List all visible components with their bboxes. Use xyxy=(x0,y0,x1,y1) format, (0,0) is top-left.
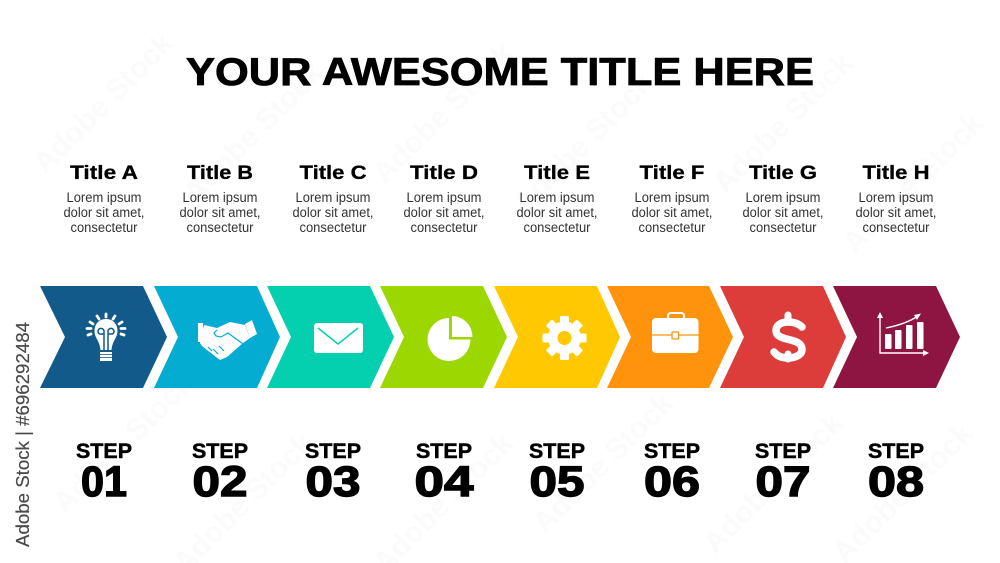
step label 05 xyxy=(529,440,585,506)
text block: Title D: Lorem ipsum xyxy=(406,190,482,205)
watermark pattern: Adobe Stock xyxy=(507,67,660,220)
text block: Title A: dolor sit amet, xyxy=(64,205,144,220)
text block: Title H: consectetur xyxy=(862,220,930,235)
text block: Title B xyxy=(180,162,260,235)
step label 02: 02 xyxy=(192,458,248,506)
text block: Title D: dolor sit amet, xyxy=(404,205,484,220)
step label 01: STEP xyxy=(76,440,132,463)
text block: Title G: Title G xyxy=(749,162,817,184)
text block: Title C: consectetur xyxy=(300,220,367,235)
text block: Title A: Title A xyxy=(70,162,138,184)
chevron 5: yellow xyxy=(494,286,620,388)
watermark pattern: Adobe Stock xyxy=(27,27,180,180)
step label 08: STEP xyxy=(868,440,924,463)
text block: Title H: Lorem ipsum xyxy=(858,190,934,205)
step label 05: STEP xyxy=(529,440,585,463)
step label 06: 06 xyxy=(644,458,700,506)
watermark pattern: Adobe Stock xyxy=(47,367,200,520)
icon: bar chart with arrows xyxy=(877,312,929,356)
step label 03 xyxy=(305,440,361,506)
chevron 2: light blue xyxy=(154,286,280,388)
step label 03: 03 xyxy=(306,458,360,506)
text block: Title A xyxy=(64,162,144,235)
icon: pie chart xyxy=(428,316,472,361)
step label 02 xyxy=(192,440,248,506)
text block: Title F: consectetur xyxy=(638,220,706,235)
icon: gear xyxy=(542,316,586,360)
icon: dollar sign xyxy=(774,315,802,359)
text block: Title H: dolor sit amet, xyxy=(856,205,936,220)
text block: Title H: Title H xyxy=(862,162,930,184)
icon: handshake xyxy=(198,320,257,360)
step label 08 xyxy=(868,440,924,506)
text block: Title C: dolor sit amet, xyxy=(292,205,374,220)
step label 06: STEP xyxy=(644,440,700,463)
step label 04 xyxy=(414,440,474,506)
text block: Title B: Lorem ipsum xyxy=(182,190,258,205)
text block: Title F: Lorem ipsum xyxy=(634,190,710,205)
step label 02: STEP xyxy=(192,440,248,463)
chevron 4: green xyxy=(380,286,507,388)
watermark pattern: Adobe Stock xyxy=(707,47,860,200)
step label 06 xyxy=(644,440,700,506)
text block: Title G: consectetur xyxy=(750,220,817,235)
chevron 7: red xyxy=(720,286,846,388)
watermark pattern: Adobe Stock xyxy=(697,407,850,560)
step label 07 xyxy=(755,440,811,506)
text block: Title F xyxy=(632,162,712,235)
text block: Title E: dolor sit amet, xyxy=(516,205,598,220)
text block: Title E: Title E xyxy=(524,162,590,184)
stock id credit: Adobe Stock | #696292484 xyxy=(13,322,33,547)
text block: Title H xyxy=(856,162,936,235)
text block: Title C xyxy=(292,162,374,235)
icon: briefcase xyxy=(652,313,698,353)
text block: Title C: Title C xyxy=(300,162,366,184)
step label 08: 08 xyxy=(868,458,924,506)
text block: Title G: Lorem ipsum xyxy=(746,190,820,205)
step label 07: 07 xyxy=(756,458,810,506)
icon: light bulb xyxy=(87,314,125,361)
text block: Title B: Title B xyxy=(187,162,253,184)
text block: Title E: Lorem ipsum xyxy=(520,190,594,205)
text block: Title F: dolor sit amet, xyxy=(632,205,712,220)
text block: Title A: Lorem ipsum xyxy=(66,190,142,205)
step label 05: 05 xyxy=(530,458,584,506)
icon: envelope xyxy=(314,323,363,353)
text block: Title C: Lorem ipsum xyxy=(296,190,370,205)
chevron 6: orange xyxy=(607,286,733,388)
text block: Title D: consectetur xyxy=(410,220,478,235)
text block: Title G: dolor sit amet, xyxy=(742,205,824,220)
chevron 3: teal xyxy=(267,286,394,388)
text block: Title B: consectetur xyxy=(186,220,254,235)
title: YOUR AWESOME TITLE HERE xyxy=(186,51,814,94)
step label 07: STEP xyxy=(755,440,811,463)
text block: Title D xyxy=(404,162,484,235)
watermark pattern: Adobe Stock xyxy=(367,37,520,190)
step label 03: STEP xyxy=(305,440,361,463)
chevron 8: maroon xyxy=(833,286,960,388)
watermark pattern: Adobe Stock xyxy=(837,107,990,260)
text block: Title D: Title D xyxy=(410,162,478,184)
text block: Title E: consectetur xyxy=(524,220,591,235)
text block: Title B: dolor sit amet, xyxy=(180,205,260,220)
text block: Title E xyxy=(516,162,598,235)
text block: Title A: consectetur xyxy=(70,220,138,235)
chevron 1: dark blue xyxy=(40,286,167,388)
text block: Title F: Title F xyxy=(640,162,705,184)
text block: Title G xyxy=(742,162,824,235)
watermark pattern: Adobe Stock xyxy=(177,57,330,210)
step label 01: 01 xyxy=(81,458,127,506)
step label 01 xyxy=(76,440,132,506)
step label 04: STEP xyxy=(416,440,472,463)
watermark pattern: Adobe Stock xyxy=(527,387,680,540)
step label 04: 04 xyxy=(414,458,474,506)
